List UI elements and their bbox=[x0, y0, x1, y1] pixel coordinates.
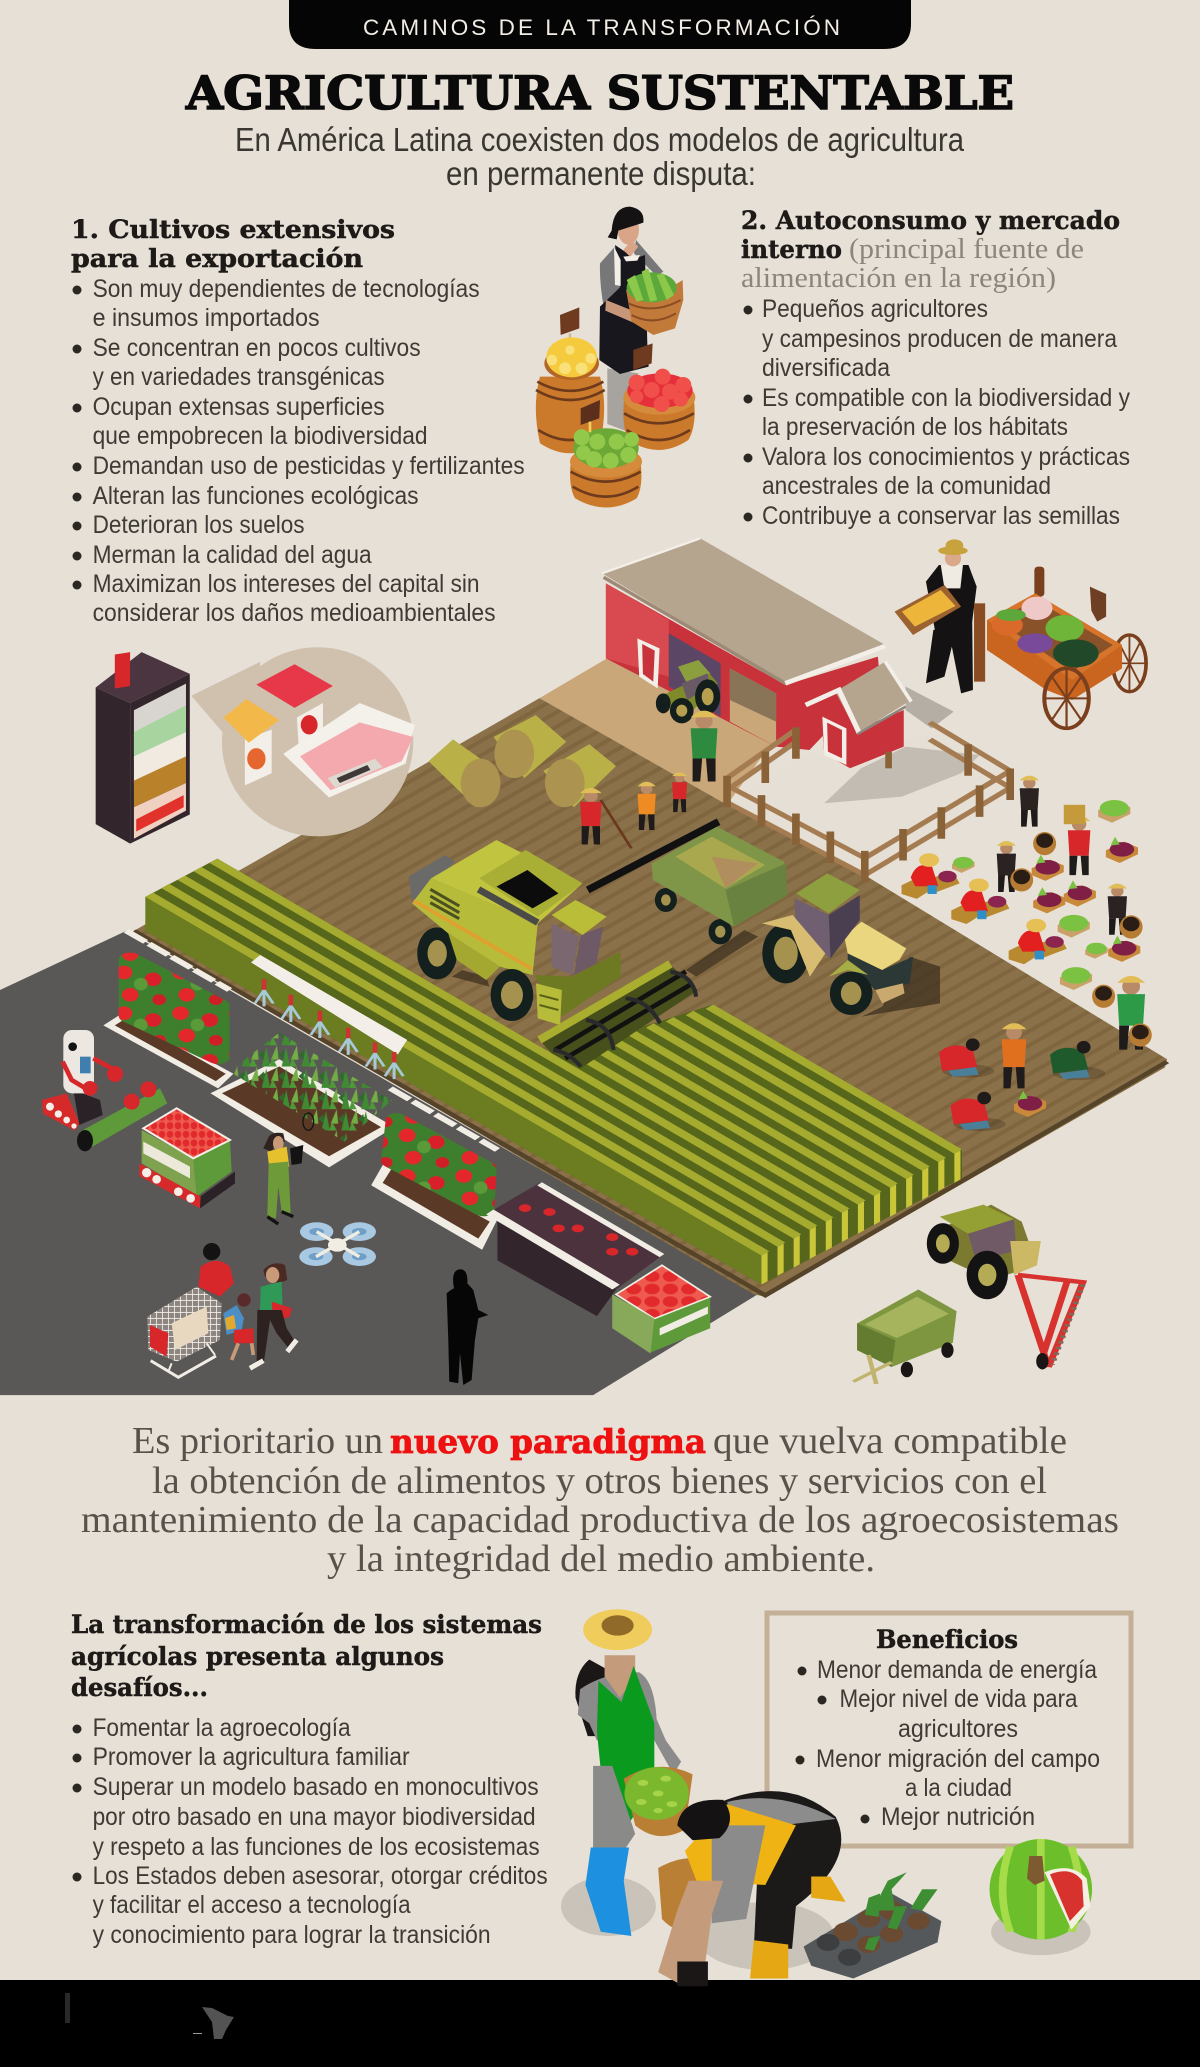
text block: desafíos: por otro basado en una mayor biodiversidad bbox=[93, 1803, 536, 1831]
tan farmyard bbox=[540, 633, 811, 805]
text block: cultivos extensivos bbox=[71, 215, 525, 627]
seedling pot bbox=[677, 1962, 708, 1986]
text block: autoconsumo: interno bbox=[741, 235, 842, 264]
harvester header bbox=[539, 963, 698, 1068]
text block: cultivos extensivos: y en variedades transgénicas bbox=[93, 363, 385, 391]
text block: cultivos extensivos: 1. Cultivos extensivos bbox=[71, 215, 395, 244]
basket on ground bbox=[658, 1858, 712, 1931]
footer band bbox=[0, 1980, 1200, 2067]
text block: cultivos extensivos: Alteran las funciones ecológicas bbox=[93, 482, 419, 510]
panel: beneficios: Mejor nutrición bbox=[881, 1803, 1035, 1831]
illustration: red barn with annex bbox=[602, 538, 980, 803]
harvester body bbox=[409, 822, 719, 1025]
title: AGRICULTURA SUSTENTABLE bbox=[185, 66, 1014, 120]
text block: desafíos: y conocimiento para lograr la transición bbox=[93, 1921, 491, 1949]
text block: cultivos extensivos: que empobrecen la biodiversidad bbox=[93, 422, 428, 450]
tomato crate robot bbox=[139, 1108, 235, 1208]
text block: autoconsumo: Es compatible con la biodiversidad y bbox=[762, 384, 1130, 412]
drone bbox=[299, 1222, 376, 1266]
illustration: farm ground and crops bbox=[0, 633, 1167, 1395]
text block: cultivos extensivos: Demandan uso de pesticidas y fertilizantes bbox=[93, 452, 525, 480]
illustration: vendor woman with fruit barrels bbox=[536, 207, 695, 507]
asphalt ground bbox=[0, 931, 758, 1395]
tractor parked at barn bbox=[656, 660, 720, 723]
subtitle bbox=[235, 121, 965, 192]
paragraph: nuevo paradigma: la obtención de alimentos y otros bienes y servicios con el bbox=[152, 1460, 1047, 1502]
corn planter bbox=[210, 1033, 394, 1167]
text block: autoconsumo: la preservación de los hábitats bbox=[762, 413, 1068, 441]
tractor shadow bbox=[452, 930, 940, 1017]
grain wagon bbox=[651, 827, 787, 944]
text block: autoconsumo bbox=[741, 206, 1130, 530]
text block: cultivos extensivos: Merman la calidad del agua bbox=[93, 541, 372, 569]
seedling tray bbox=[804, 1872, 941, 1979]
text block: autoconsumo: 2. Autoconsumo y mercado bbox=[741, 206, 1120, 235]
paragraph: nuevo paradigma: mantenimiento de la capacidad productiva de los agroecosistemas bbox=[81, 1499, 1119, 1541]
illustration: fruit vendor with cart bbox=[894, 539, 1146, 728]
text block: cultivos extensivos: Deterioran los suelos bbox=[93, 511, 305, 539]
panel: beneficios: Mejor nivel de vida para bbox=[840, 1685, 1078, 1713]
watermelon bbox=[990, 1839, 1092, 1955]
text block: autoconsumo: Contribuye a conservar las semillas bbox=[762, 502, 1120, 530]
curb segments bbox=[126, 931, 497, 1150]
kneeling farmer bbox=[658, 1791, 846, 1985]
text block: autoconsumo: alimentación en la región) bbox=[741, 262, 1056, 294]
text block: autoconsumo: Pequeños agricultores bbox=[762, 295, 988, 323]
panel: beneficios: Beneficios bbox=[876, 1625, 1018, 1654]
text block: desafíos: Los Estados deben asesorar, otorgar créditos bbox=[93, 1862, 548, 1890]
text block: desafíos: agrícolas presenta algunos bbox=[71, 1642, 444, 1671]
standing silhouette bbox=[447, 1269, 488, 1385]
text block: cultivos extensivos: Ocupan extensas superficies bbox=[93, 393, 385, 421]
text block: autoconsumo: ancestrales de la comunidad bbox=[762, 472, 1051, 500]
text block: desafíos: y respeto a las funciones de los ecosistemas bbox=[93, 1833, 540, 1861]
panel: beneficios: Menor migración del campo bbox=[816, 1745, 1100, 1773]
text block: desafíos: Fomentar la agroecología bbox=[93, 1714, 351, 1742]
paragraph: nuevo paradigma: Es prioritario un bbox=[132, 1420, 383, 1462]
text block: desafíos: y facilitar el acceso a tecnología bbox=[93, 1891, 411, 1919]
irrigation bar bbox=[251, 955, 407, 1079]
text block: cultivos extensivos: Se concentran en pocos cultivos bbox=[93, 334, 421, 362]
text block: desafíos: desafíos... bbox=[71, 1673, 208, 1702]
hay bales bbox=[429, 715, 616, 807]
bubble with packaged food bbox=[191, 647, 415, 836]
conveyor belt bbox=[490, 1183, 662, 1316]
illustration: farmers and seedlings bbox=[561, 1609, 1092, 1986]
tomato planter 1 bbox=[103, 960, 233, 1088]
illustration: robots, drone and shoppers bbox=[42, 1030, 488, 1385]
brown field bbox=[134, 698, 1167, 1297]
footer logos bbox=[65, 1993, 234, 2039]
subtitle: en permanente disputa: bbox=[446, 155, 756, 192]
text block: cultivos extensivos: Son muy dependientes de tecnologías bbox=[93, 275, 480, 303]
illustration: farm structures and workers bbox=[96, 647, 1152, 1384]
illustration: combine harvester with wagon and tractor bbox=[409, 822, 940, 1068]
panel: beneficios bbox=[767, 1613, 1131, 1846]
farming robot bbox=[42, 1030, 167, 1151]
refrigerated display case bbox=[96, 652, 190, 844]
text block: cultivos extensivos: e insumos importados bbox=[93, 304, 320, 332]
green trailer bbox=[853, 1289, 957, 1384]
panel: beneficios: a la ciudad bbox=[905, 1774, 1012, 1802]
shoppers with cart bbox=[147, 1243, 297, 1377]
paragraph: nuevo paradigma bbox=[81, 1420, 1119, 1580]
text block: desafíos: Superar un modelo basado en monocultivos bbox=[93, 1773, 539, 1801]
tomato planter 2 bbox=[371, 1120, 497, 1250]
header banner: CAMINOS DE LA TRANSFORMACIÓN bbox=[363, 15, 840, 40]
tractor bbox=[762, 873, 913, 1015]
text block: autoconsumo: diversificada bbox=[762, 354, 890, 382]
field workers bbox=[939, 1023, 1105, 1131]
text block: cultivos extensivos: para la exportación bbox=[71, 244, 363, 273]
market gardeners area bbox=[902, 776, 1152, 1050]
pen ground bbox=[727, 732, 1014, 878]
text block: autoconsumo: (principal fuente de bbox=[849, 233, 1084, 265]
text block: autoconsumo: y campesinos producen de manera bbox=[762, 325, 1117, 353]
text block: cultivos extensivos: considerar los daños medioambientales bbox=[93, 599, 496, 627]
text block: autoconsumo: Valora los conocimientos y prácticas bbox=[762, 443, 1130, 471]
farmer with tablet bbox=[263, 1113, 314, 1224]
text block: desafíos: La transformación de los sistemas bbox=[71, 1610, 542, 1639]
paragraph: nuevo paradigma: que vuelva compatible bbox=[713, 1420, 1067, 1462]
text block: desafíos: Promover la agricultura familiar bbox=[93, 1743, 410, 1771]
tomato crate bbox=[612, 1265, 710, 1353]
woman farmer with basket bbox=[561, 1609, 693, 1936]
panel: beneficios: Menor demanda de energía bbox=[817, 1656, 1097, 1684]
field edge bbox=[134, 931, 1167, 1295]
tractor with harrow bbox=[927, 1205, 1083, 1369]
subtitle: En América Latina coexisten dos modelos de agricultura bbox=[235, 121, 965, 158]
crop ridges bbox=[145, 859, 962, 1285]
farm workers near bales bbox=[580, 711, 717, 848]
text block: cultivos extensivos: Maximizan los intereses del capital sin bbox=[93, 570, 480, 598]
paragraph: nuevo paradigma: y la integridad del medio ambiente. bbox=[327, 1538, 875, 1580]
paragraph: nuevo paradigma: nuevo paradigma bbox=[390, 1422, 706, 1461]
corral fence bbox=[727, 722, 1010, 882]
panel: beneficios: agricultores bbox=[898, 1715, 1018, 1743]
header banner bbox=[289, 0, 911, 49]
text block: desafíos bbox=[71, 1610, 548, 1949]
